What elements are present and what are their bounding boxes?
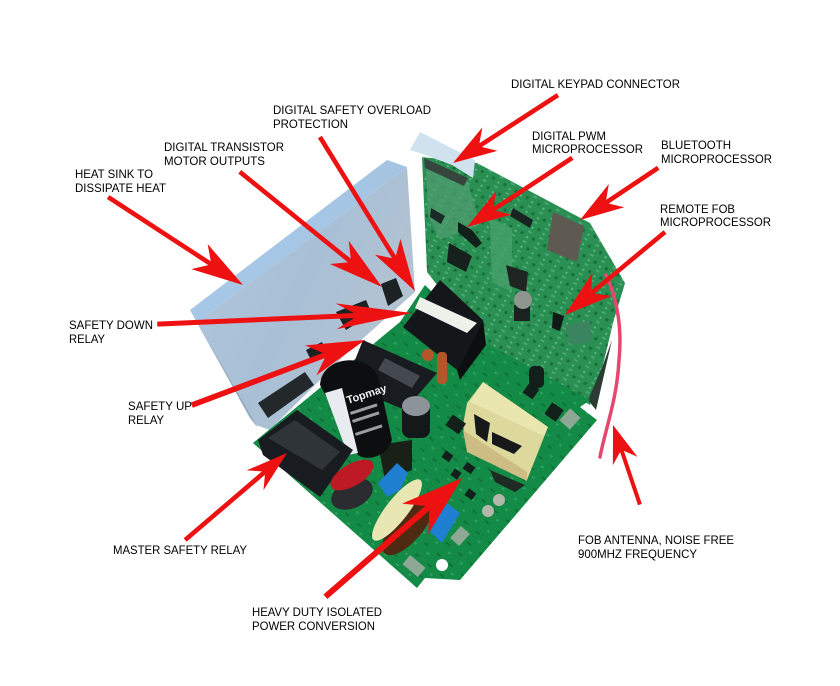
arrow: digital keypad connector — [445, 83, 566, 175]
label: master safety relay: MASTER SAFETY RELAY — [113, 543, 247, 557]
arrow: master safety relay — [177, 443, 295, 550]
PWM microprocessor chip — [458, 222, 482, 248]
remote fob chip — [552, 312, 564, 331]
arrows — [100, 83, 675, 612]
label: heavy duty isolated power conversion: HEAVY DUTY ISOLATED — [252, 605, 382, 619]
label: digital PWM microprocessor: DIGITAL PWM — [532, 129, 606, 143]
heat sink transistors — [306, 278, 403, 362]
label: digital PWM microprocessor — [532, 129, 643, 156]
label: digital safety overload protection: PROTECTION — [273, 117, 348, 131]
relay: safety down — [403, 280, 486, 380]
label: digital transistor motor outputs: DIGITAL TRANSISTOR — [164, 140, 284, 154]
dark windings below transformer — [490, 470, 525, 492]
silver capacitor — [514, 291, 532, 321]
arrow: safety up relay — [186, 325, 371, 420]
label: remote fob microprocessor: REMOTE FOB — [660, 202, 735, 216]
label: bluetooth microprocessor — [661, 138, 772, 166]
label: remote fob microprocessor: MICROPROCESSOR — [660, 215, 771, 229]
label: safety down relay: RELAY — [69, 332, 105, 346]
mounting hole — [436, 559, 448, 571]
bluetooth module — [547, 212, 584, 262]
label: remote fob microprocessor — [660, 202, 771, 229]
labels — [69, 77, 772, 633]
small capacitor — [402, 396, 430, 438]
label: heavy duty isolated power conversion: POWER CONVERSION — [252, 619, 375, 633]
main processor chip — [447, 243, 472, 272]
small chip left — [430, 208, 445, 224]
label: heavy duty isolated power conversion — [252, 605, 382, 633]
label: fob antenna: FOB ANTENNA, NOISE FREE — [578, 533, 734, 547]
keypad connector — [410, 132, 475, 186]
arrow: digital PWM microprocessor — [459, 146, 580, 239]
label: digital transistor motor outputs: MOTOR OUTPUTS — [164, 154, 265, 168]
label: heat sink — [75, 167, 167, 195]
arrow: digital safety overload protection — [307, 129, 428, 299]
label: digital safety overload protection: DIGITAL SAFETY OVERLOAD — [273, 103, 431, 117]
label: bluetooth microprocessor: BLUETOOTH — [661, 138, 731, 152]
arrow: digital transistor motor outputs — [230, 160, 391, 299]
label: bluetooth microprocessor: MICROPROCESSOR — [661, 152, 772, 166]
arrow: remote fob microprocessor — [555, 220, 675, 327]
label: safety down relay: SAFETY DOWN — [69, 318, 153, 332]
label: safety up relay — [128, 399, 192, 427]
capacitor brand: Topmay — [345, 382, 389, 407]
black inductor — [506, 265, 528, 292]
label: digital PWM microprocessor: MICROPROCESSOR — [532, 142, 643, 156]
dark cluster behind red cap — [378, 440, 412, 480]
via column — [490, 218, 512, 292]
small chips — [441, 366, 564, 500]
label: fob antenna: 900MHZ FREQUENCY — [578, 547, 697, 561]
label: fob antenna — [578, 533, 734, 561]
red capacitor cap — [326, 453, 378, 516]
small silver capacitors — [482, 494, 505, 517]
orange components — [422, 349, 447, 384]
dip header — [510, 208, 533, 228]
dense components, upper left — [426, 165, 480, 240]
arrow: bluetooth microprocessor — [572, 156, 666, 232]
arrow: heat sink — [100, 185, 251, 298]
label: safety up relay: RELAY — [128, 413, 164, 427]
transformer — [463, 382, 548, 492]
label: digital transistor motor outputs — [164, 140, 284, 168]
label: digital safety overload protection — [273, 103, 431, 131]
capacitor markings — [350, 403, 383, 436]
label: heat sink: HEAT SINK TO — [75, 167, 153, 181]
capacitor sleeve — [325, 388, 358, 455]
label: safety down relay — [69, 318, 153, 346]
toroid coil — [365, 473, 443, 563]
relay: safety up — [345, 340, 437, 410]
photo: circuit board assembly — [190, 132, 625, 588]
arrow: safety down relay — [157, 300, 413, 337]
fob antenna wire — [600, 275, 620, 457]
large capacitor — [320, 360, 392, 458]
label: heat sink: DISSIPATE HEAT — [75, 181, 167, 195]
screw terminals — [402, 408, 581, 577]
label: safety up relay: SAFETY UP — [128, 399, 192, 413]
component cluster right — [565, 320, 592, 345]
blue capacitors — [378, 463, 460, 543]
arrow: heavy duty isolated power conversion — [312, 463, 475, 612]
heat sink — [190, 160, 415, 430]
board edge shadow — [588, 340, 612, 410]
arrow: fob antenna — [601, 421, 652, 509]
vertical logic board — [422, 157, 625, 410]
horizontal power board — [253, 278, 597, 588]
transformer core notches — [474, 414, 490, 442]
relay: master safety — [258, 410, 353, 497]
relay label — [415, 297, 477, 333]
label: digital keypad connector: DIGITAL KEYPAD CONNECTOR — [511, 77, 680, 91]
transistor block, lower left — [258, 372, 314, 418]
